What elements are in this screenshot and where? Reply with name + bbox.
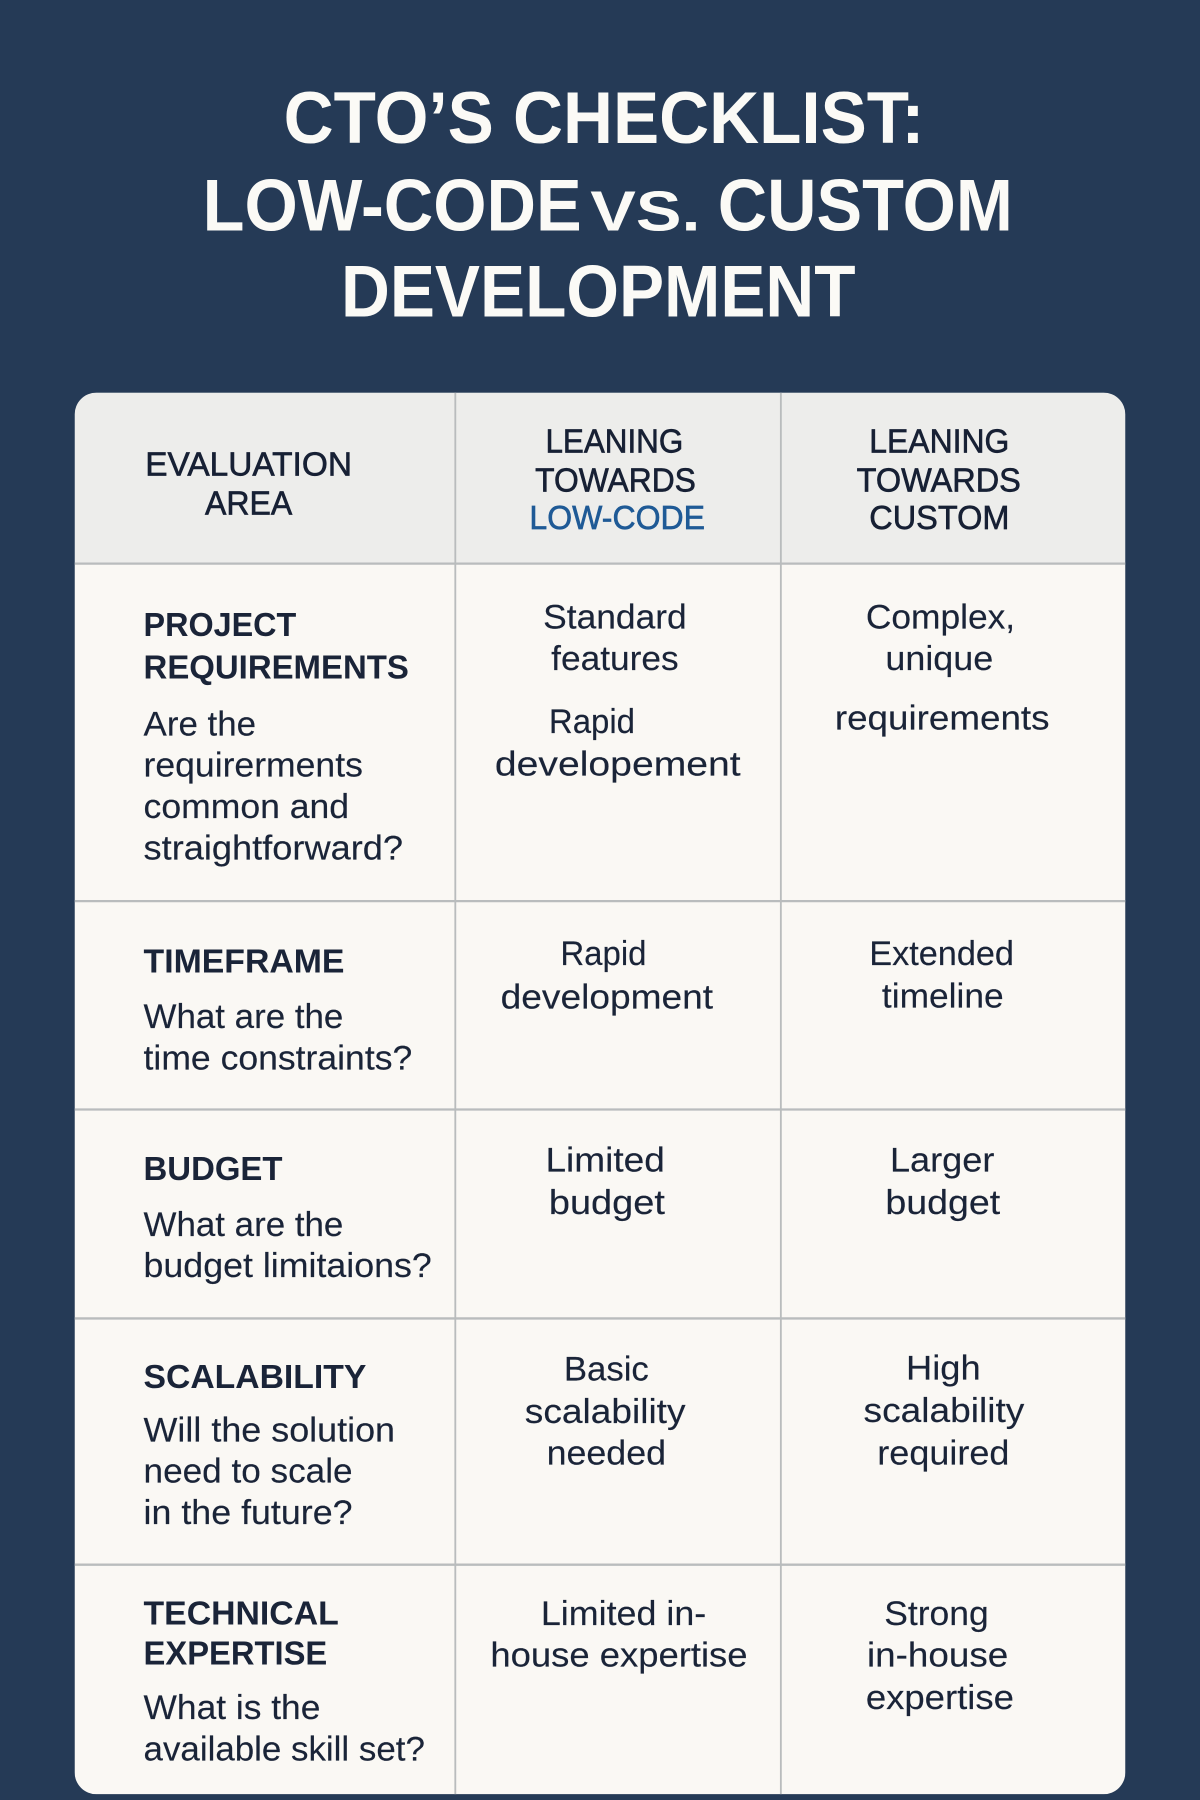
custom: technical expertise: in-house — [867, 1636, 1008, 1674]
low-code: timeframe: Rapid — [560, 935, 647, 973]
evaluation area: budget: What are the — [144, 1206, 343, 1244]
low-code: scalability: scalability — [525, 1393, 686, 1431]
evaluation area: project requirements: REQUIREMENTS — [144, 649, 409, 686]
custom: project requirements: Complex, — [866, 599, 1015, 637]
custom: project requirements — [835, 599, 1050, 738]
checklist table — [75, 393, 1125, 1794]
low-code: budget: Limited — [545, 1142, 665, 1180]
evaluation area: timeframe: What are the — [144, 998, 343, 1036]
custom: timeframe — [872, 940, 1012, 1008]
custom: technical expertise: Strong — [884, 1595, 989, 1633]
evaluation area: technical expertise: What is the — [144, 1689, 320, 1727]
title: DEVELOPMENT — [341, 250, 856, 332]
row: technical expertise — [75, 1565, 1125, 1794]
header: evaluation area: EVALUATION — [145, 446, 352, 483]
header: leaning towards low-code: TOWARDS — [535, 462, 696, 499]
low-code: scalability — [526, 1355, 686, 1465]
evaluation area: project requirements: straightforward? — [144, 829, 403, 867]
header: evaluation area: AREA — [205, 485, 293, 522]
title: LOW-CODE — [203, 163, 582, 246]
header: leaning towards custom — [857, 428, 1020, 530]
evaluation area: technical expertise: TECHNICAL — [144, 1595, 339, 1632]
header: leaning towards low-code: LOW-CODE — [529, 500, 705, 537]
low-code: technical expertise — [490, 1595, 748, 1674]
custom: budget — [888, 1148, 1000, 1222]
custom: project requirements: unique — [885, 640, 993, 678]
low-code: budget: budget — [549, 1184, 666, 1222]
row: scalability — [75, 1318, 1125, 1565]
evaluation area: project requirements — [144, 607, 409, 867]
evaluation area: scalability: SCALABILITY — [144, 1359, 366, 1396]
custom: scalability: required — [877, 1434, 1009, 1472]
low-code: project requirements: developement — [495, 746, 741, 784]
custom: scalability: High — [906, 1349, 981, 1387]
evaluation area: scalability — [144, 1359, 395, 1532]
row: budget — [75, 1109, 1125, 1318]
low-code: project requirements: Rapid — [549, 703, 635, 741]
custom: scalability — [864, 1349, 1024, 1472]
title: CUSTOM — [718, 163, 1013, 246]
title: VS. — [590, 179, 700, 242]
low-code: technical expertise: house expertise — [490, 1636, 748, 1674]
custom: technical expertise: expertise — [866, 1679, 1014, 1717]
header: leaning towards custom: CUSTOM — [869, 500, 1009, 537]
evaluation area: project requirements: PROJECT — [144, 607, 296, 644]
evaluation area: timeframe: TIMEFRAME — [144, 943, 344, 980]
evaluation area: budget — [144, 1151, 432, 1285]
row: project requirements — [75, 564, 1125, 901]
header row — [75, 393, 1125, 564]
low-code: scalability: Basic — [564, 1351, 649, 1389]
evaluation area: technical expertise: EXPERTISE — [144, 1636, 327, 1673]
evaluation area: timeframe: time constraints? — [144, 1039, 412, 1077]
row: timeframe — [75, 901, 1125, 1109]
evaluation area: budget: BUDGET — [144, 1151, 282, 1188]
custom: project requirements: requirements — [835, 700, 1050, 738]
evaluation area: project requirements: requirerments — [144, 747, 363, 785]
evaluation area: budget: budget limitaions? — [144, 1247, 432, 1285]
low-code: technical expertise: Limited in- — [541, 1595, 706, 1633]
evaluation area: scalability: Will the solution — [144, 1411, 395, 1449]
header: leaning towards custom: TOWARDS — [857, 462, 1021, 499]
custom: budget: Larger — [890, 1142, 994, 1180]
low-code: project requirements: Standard — [543, 599, 687, 637]
custom: budget: budget — [885, 1184, 1001, 1222]
evaluation area: technical expertise: available skill set? — [144, 1731, 425, 1769]
low-code: timeframe — [501, 935, 714, 1017]
custom: technical expertise — [866, 1595, 1014, 1717]
header: leaning towards low-code — [532, 428, 704, 530]
custom: scalability: scalability — [864, 1392, 1024, 1430]
low-code: budget — [545, 1142, 666, 1222]
low-code: project requirements — [495, 599, 741, 784]
evaluation area: project requirements: Are the — [144, 705, 256, 743]
evaluation area: scalability: need to scale — [144, 1453, 353, 1491]
low-code: scalability: needed — [547, 1434, 666, 1472]
title — [203, 76, 1013, 332]
evaluation area: timeframe — [144, 950, 411, 1070]
evaluation area: technical expertise — [144, 1595, 425, 1769]
evaluation area: scalability: in the future? — [144, 1494, 353, 1532]
custom: timeframe: timeline — [882, 977, 1004, 1015]
header: leaning towards low-code: LEANING — [545, 423, 683, 460]
title: CTO’S CHECKLIST: — [284, 76, 924, 159]
evaluation area: project requirements: common and — [144, 788, 349, 826]
low-code: project requirements: features — [551, 640, 679, 678]
low-code: timeframe: development — [501, 979, 714, 1017]
header: evaluation area — [148, 452, 350, 515]
header: leaning towards custom: LEANING — [869, 423, 1009, 460]
custom: timeframe: Extended — [869, 935, 1014, 973]
